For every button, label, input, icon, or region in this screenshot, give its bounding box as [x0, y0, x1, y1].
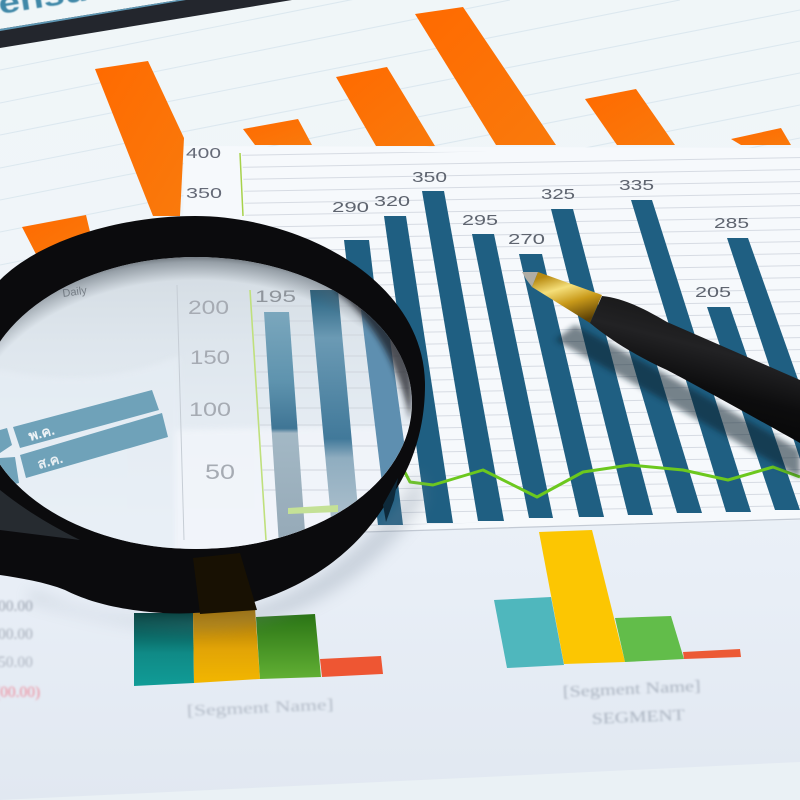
- enlarged axis numbers: 50: [205, 461, 235, 484]
- value labels: [332, 169, 749, 301]
- bottom-right segment chart: [494, 530, 741, 728]
- bottom-right segment chart: SEGMENT: [591, 707, 686, 728]
- axis labels: [186, 145, 222, 202]
- page header: dark band and cropped heading: [0, 0, 292, 48]
- orange bar chart on the top sheet: [22, 7, 791, 258]
- pen tip: [522, 272, 538, 287]
- blurred figures at the lower left: [0, 598, 40, 701]
- lens shadow: [30, 470, 425, 628]
- value labels: 290: [332, 199, 369, 216]
- bottom-left segment chart: [Segment Name]: [186, 697, 334, 720]
- enlarged axis numbers: 195: [255, 287, 296, 306]
- pen: [522, 272, 800, 478]
- black frame: [0, 216, 425, 614]
- reflection on frame: [193, 553, 257, 614]
- enlarged axis numbers: 150: [190, 348, 230, 369]
- axis labels: 400: [186, 145, 221, 162]
- enlarged axis numbers: 200: [188, 298, 229, 319]
- pen body: [590, 296, 800, 443]
- value labels: 325: [541, 186, 575, 203]
- value labels: 320: [374, 193, 410, 210]
- view through the lens: [0, 257, 420, 560]
- value labels: 285: [714, 215, 749, 232]
- second sheet: blue bar chart: [180, 145, 800, 542]
- view through the lens: พ.ค.: [27, 422, 56, 444]
- green axis: [240, 153, 243, 216]
- bottom-right segment chart: [Segment Name]: [562, 678, 701, 701]
- value labels: 205: [695, 284, 731, 301]
- value labels: 270: [508, 231, 545, 248]
- green trend line: [400, 463, 800, 497]
- table cells: [0, 390, 168, 488]
- view through the lens: ส.ค.: [36, 450, 65, 472]
- top paper grid lines: [0, 0, 800, 298]
- pen gold cone: [532, 272, 602, 323]
- value labels: 350: [412, 169, 447, 186]
- enlarged axis numbers: 100: [189, 400, 231, 421]
- bottom-left segment chart: [134, 608, 383, 720]
- magnifying glass: [0, 216, 425, 628]
- glass edge shading: [0, 257, 393, 352]
- lens glass: [0, 257, 412, 549]
- value labels: 295: [462, 212, 498, 229]
- blue bars: [344, 191, 800, 525]
- rule lines in lens: [252, 306, 420, 490]
- enlarged axis numbers: [188, 287, 296, 484]
- lens bars: [264, 312, 306, 545]
- value labels: 335: [619, 177, 654, 194]
- axis labels: 350: [186, 185, 222, 202]
- view through the lens: Daily: [62, 285, 88, 300]
- paper bottom edge: [0, 762, 800, 800]
